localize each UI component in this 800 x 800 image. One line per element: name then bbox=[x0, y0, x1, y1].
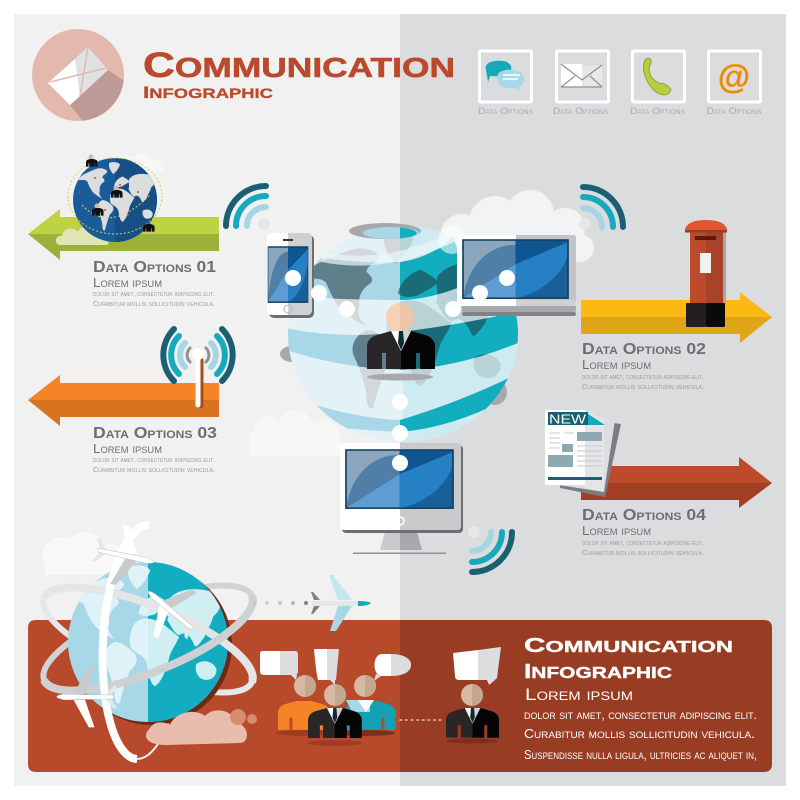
flight dots bbox=[253, 601, 308, 605]
text block: data options 04: Data Options 04 bbox=[582, 507, 706, 524]
icon: small people on globe bbox=[86, 154, 155, 234]
label: NEW banner: NEW bbox=[549, 412, 587, 426]
ring highlight bbox=[322, 237, 453, 261]
arrow: yellow right with postbox bbox=[581, 220, 772, 343]
person: black suit bbox=[308, 684, 362, 746]
bottom globe with orbiting planes bbox=[31, 520, 265, 761]
device: smartphone bbox=[267, 233, 314, 318]
header icons row bbox=[478, 51, 762, 116]
text block: data options 04 bbox=[582, 507, 706, 557]
person: speaker with bubble bbox=[446, 647, 501, 744]
icon: world globe bbox=[68, 158, 162, 242]
footer text block bbox=[524, 631, 757, 762]
cloud: behind bottom globe bbox=[42, 532, 124, 575]
text block: data options 03 bbox=[93, 425, 217, 474]
icon: envelope badge bbox=[32, 29, 124, 121]
text block: data options 02: Data Options 02 bbox=[582, 341, 706, 358]
central globe bbox=[280, 215, 525, 450]
device: desktop monitor bbox=[340, 443, 463, 554]
plane: lower left bbox=[56, 667, 117, 727]
speech bubble: right bbox=[374, 654, 411, 681]
plane: middle bbox=[129, 568, 214, 654]
arrow: orange left with antenna bbox=[28, 329, 233, 426]
device: laptop bbox=[457, 235, 576, 316]
text block: data options 03: Data Options 03 bbox=[93, 425, 217, 442]
text block: data options 03: Curabitur mollis sollicitudin vehicula. bbox=[93, 467, 215, 474]
title: Communication bbox=[143, 42, 455, 86]
text block: data options 02: Lorem ipsum bbox=[582, 357, 651, 372]
plane: blue bbox=[311, 575, 371, 631]
text block: data options 04: dolor sit amet, consectetur adipiscing elit. bbox=[582, 540, 704, 547]
people group with speech bubbles bbox=[260, 649, 411, 746]
orbit rings in front bbox=[44, 525, 253, 759]
clouds behind monitor bbox=[250, 410, 340, 456]
icon: wifi top left bbox=[226, 186, 270, 230]
text block: data options 01: Curabitur mollis sollicitudin vehicula. bbox=[93, 301, 215, 308]
footer subheading: Infographic bbox=[524, 657, 673, 683]
cloud behind laptop bbox=[440, 190, 594, 262]
text block: data options 01 bbox=[93, 259, 216, 308]
icon: envelope bbox=[553, 51, 608, 116]
cloud overlap bbox=[438, 226, 466, 254]
icon: small cloud bbox=[56, 226, 109, 245]
text block: data options 03: Lorem ipsum bbox=[93, 441, 162, 456]
globe bbox=[65, 562, 232, 725]
subtitle: Infographic bbox=[143, 81, 273, 103]
orbit rings behind globe bbox=[31, 523, 265, 761]
person: central businessman bbox=[367, 303, 435, 380]
cloud: pink front bbox=[146, 709, 257, 745]
icon: newspaper bbox=[545, 410, 621, 497]
text block: data options 02: dolor sit amet, consectetur adipiscing elit. bbox=[582, 374, 704, 381]
person: teal bbox=[335, 675, 396, 736]
arrow: red right with newspaper bbox=[545, 410, 772, 508]
text block: data options 01: Data Options 01 bbox=[93, 259, 216, 276]
dotted connector bbox=[400, 719, 441, 721]
title bbox=[143, 42, 455, 103]
icon: at sign: @ bbox=[718, 58, 750, 95]
globe top cap bbox=[349, 223, 421, 239]
text block: data options 02: Curabitur mollis sollicitudin vehicula. bbox=[582, 384, 704, 391]
plane: top bbox=[88, 520, 160, 592]
icon: at sign bbox=[706, 51, 762, 116]
icon: envelope: Data Options bbox=[553, 106, 608, 116]
footer copy: Suspendisse nulla ligula, ultricies ac aliquet in, bbox=[524, 748, 757, 762]
icon: chat bubbles: Data Options bbox=[478, 106, 533, 116]
icon: back cloud bbox=[111, 153, 164, 172]
icon: phone handset: Data Options bbox=[630, 106, 685, 116]
panel: red footer bbox=[28, 620, 772, 772]
icon: wifi bottom bbox=[468, 526, 512, 572]
text block: data options 02 bbox=[582, 341, 706, 391]
text block: data options 04: Lorem ipsum bbox=[582, 523, 651, 538]
icon: chat bubbles bbox=[478, 51, 533, 116]
icon: radio antenna bbox=[163, 329, 233, 406]
speech bubble: middle bbox=[314, 649, 339, 685]
text block: data options 03: dolor sit amet, consectetur adipiscing elit. bbox=[93, 457, 215, 464]
icon: at sign: Data Options bbox=[706, 106, 762, 116]
speech bubble: left bbox=[260, 651, 298, 680]
text block: data options 01: dolor sit amet, consectetur adipiscing elit. bbox=[93, 291, 215, 298]
person: orange bbox=[275, 675, 335, 736]
text block: data options 01: Lorem ipsum bbox=[93, 275, 162, 290]
icon: wifi top right bbox=[579, 187, 623, 230]
footer heading: C ommunication bbox=[524, 631, 733, 657]
footer copy bbox=[524, 708, 757, 762]
arrow: green left with globe bbox=[28, 153, 219, 260]
footer copy: Curabitur mollis sollicitudin vehicula. bbox=[524, 727, 755, 741]
text block: data options 04: Curabitur mollis sollicitudin vehicula. bbox=[582, 550, 704, 557]
icon: phone handset bbox=[630, 51, 685, 116]
footer copy: dolor sit amet, consectetur adipiscing elit. bbox=[524, 708, 757, 722]
connection dots bbox=[285, 270, 515, 471]
icon: red postbox bbox=[685, 220, 727, 327]
footer lorem: Lorem ipsum bbox=[525, 685, 633, 704]
